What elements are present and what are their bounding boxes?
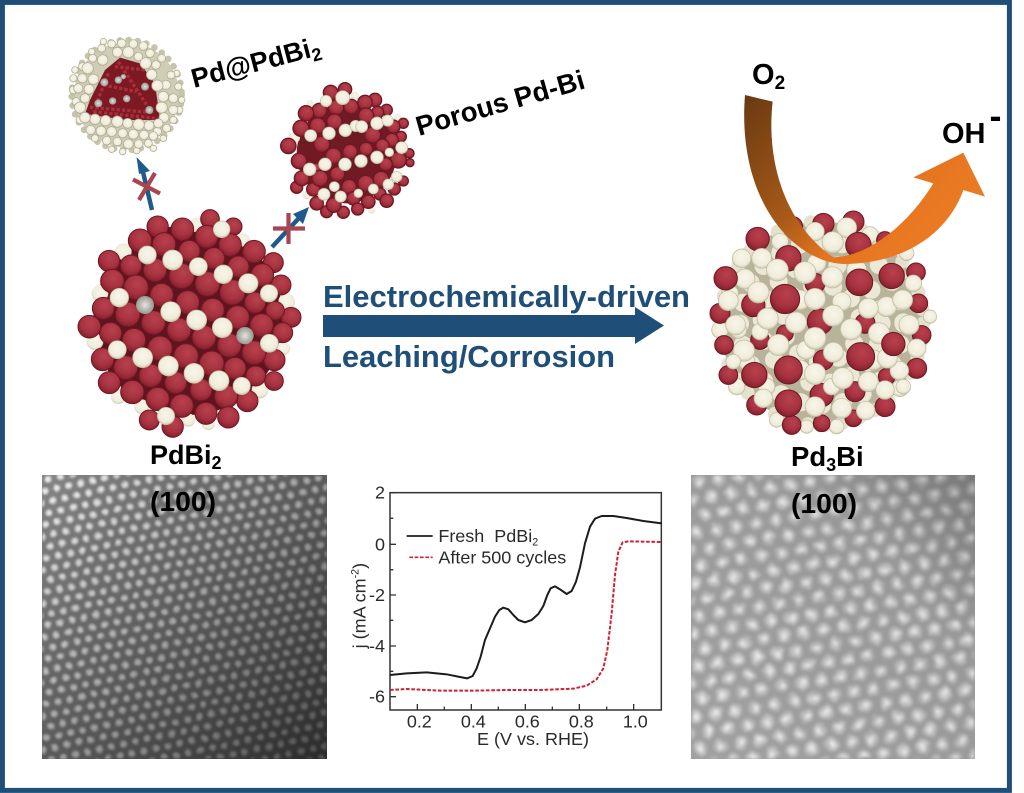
label: PdBi2: 2 — [212, 453, 222, 473]
polarization curve chart — [349, 483, 662, 749]
nanoparticle: porous Pd-Bi — [281, 83, 414, 218]
x-axis title: E (V vs. RHE) — [477, 729, 589, 749]
x-axis tick labels: 0.4 — [461, 711, 486, 731]
label: Pd3Bi: Pd — [791, 441, 826, 472]
y-axis tick labels: -4 — [369, 636, 385, 656]
nanoparticle: Pd3Bi — [710, 211, 937, 434]
x-axis tick labels: 0.2 — [407, 711, 432, 731]
label: Porous Pd-Bi: Porous Pd-Bi — [412, 64, 588, 142]
x-axis tick labels: 0.8 — [569, 711, 594, 731]
legend: After 500 cycles — [438, 547, 566, 567]
blocked arrow to porous Pd-Bi — [272, 207, 309, 247]
y-axis tick labels: -2 — [369, 585, 385, 605]
label: OH-: - — [990, 95, 1002, 136]
y-axis tick labels — [369, 483, 385, 707]
label: Pd3Bi (100): (100) — [791, 488, 857, 519]
y-axis tick labels: 2 — [375, 483, 385, 503]
label: Pd3Bi: 3 — [826, 455, 836, 475]
curve: after 500 cycles — [390, 541, 662, 691]
label: PdBi2: PdBi — [150, 440, 212, 470]
legend: 2 — [532, 536, 538, 548]
y-axis title: ) — [349, 563, 369, 569]
main process arrow — [323, 307, 664, 344]
label: PdBi2 (100): (100) — [150, 486, 216, 517]
y-axis tick labels: -6 — [369, 687, 385, 707]
label: O2: O — [752, 59, 775, 91]
x-axis tick labels: 0.6 — [515, 711, 540, 731]
STEM image: PdBi2 (100) — [42, 475, 327, 759]
label: OH-: OH — [942, 118, 986, 150]
blocked arrow to Pd@PdBi2 — [133, 157, 160, 210]
curve: fresh PdBi2 — [390, 516, 662, 678]
x-axis tick labels: 1.0 — [623, 711, 648, 731]
label: Pd@PdBi2: 2 — [310, 44, 324, 66]
y-axis title: j (mA cm — [349, 578, 369, 648]
STEM image: Pd3Bi (100) — [691, 475, 975, 759]
x-axis tick labels — [407, 711, 648, 731]
y-axis tick labels: 0 — [375, 534, 385, 554]
legend: Fresh PdBi — [438, 526, 532, 546]
nanoparticle: PdBi2 — [78, 210, 301, 437]
label: Pd@PdBi2: Pd@PdBi — [188, 34, 314, 94]
y-axis title: -2 — [350, 569, 362, 578]
process label: Electrochemically-driven: Electrochemically-driven — [323, 279, 690, 314]
nanoparticle: Pd@PdBi2 core-shell — [69, 38, 185, 155]
process label: Leaching/Corrosion: Leaching/Corrosion — [323, 339, 615, 374]
reaction arrow: O2 to OH- — [744, 95, 985, 264]
label: O2: 2 — [775, 73, 785, 94]
label: Pd3Bi: Bi — [836, 441, 864, 472]
legend — [407, 526, 566, 567]
